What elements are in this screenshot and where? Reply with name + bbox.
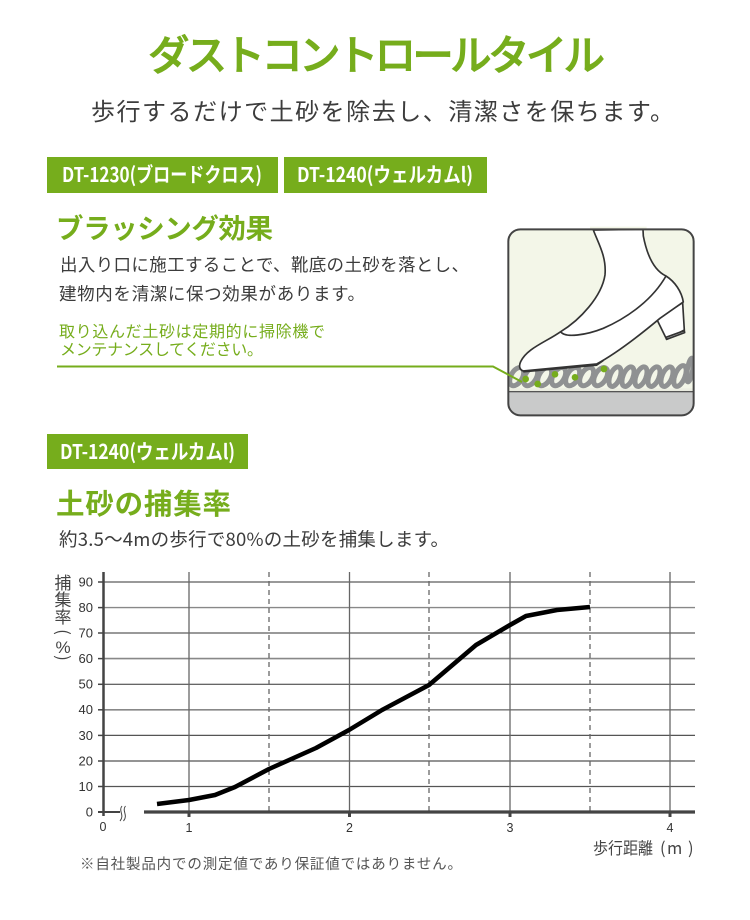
y axis title: % [55,638,71,657]
x axis tick labels: 3 [507,821,514,835]
soil particles [522,366,607,387]
tag: DT-1230: DT-1230(ブロードクロス) [62,158,262,188]
x axis tick labels: 4 [667,821,674,835]
x axis title: 歩行距離 [593,835,653,859]
x axis tick labels [100,820,674,835]
line chart [52,569,695,859]
y axis tick labels: 40 [79,702,93,717]
y axis tick labels: 10 [79,779,93,794]
y axis title: 捕 [54,569,72,594]
y axis title: ( [52,629,77,635]
body text: brushing effect: 建物内を清潔に保つ効果があります。 [59,281,365,306]
y axis tick labels: 70 [79,626,93,640]
y axis tick labels: 20 [79,753,93,768]
maintenance note: メンテナンスしてください。 [60,336,263,360]
x axis title [593,835,694,859]
y axis tick labels: 90 [79,574,93,590]
maintenance note: 取り込んだ土砂は定期的に掃除機で [59,318,325,342]
tag: DT-1240 top: DT-1240(ウェルカムl) [297,158,473,188]
y axis tick labels: 80 [79,600,93,615]
x axis tick labels: 1 [186,821,193,835]
subtitle: 歩行するだけで土砂を除去し、清潔さを保ちます。 [91,92,674,127]
title: ダストコントロールタイル [148,22,605,82]
tag: DT-1240 chart: DT-1240(ウェルカムl) [60,435,235,465]
x axis tick labels: 2 [346,821,353,835]
leader line [57,366,522,382]
y axis title: 集 [54,586,72,611]
y axis tick labels: 0 [86,804,93,820]
axes [98,572,695,821]
vertical grid [189,572,670,812]
x axis tick labels: 0 [100,820,107,834]
capture rate description: 約3.5〜4mの歩行で80%の土砂を捕集します。 [59,526,449,552]
y axis title: 率 [54,603,72,628]
y axis title: ) [52,655,77,661]
y axis title [52,569,77,661]
x axis title: (m) [660,835,694,859]
brush coils [507,358,695,388]
y axis tick labels: 30 [79,728,93,743]
horizontal grid [103,582,695,786]
footnote: ※自社製品内での測定値であり保証値ではありません。 [80,853,462,874]
y axis tick labels: 50 [79,677,93,692]
y axis tick labels [79,574,93,820]
maintenance note [59,318,325,360]
illustration: shoe on brush tile [507,227,695,416]
y axis tick labels: 60 [79,651,93,666]
shoe [520,227,685,372]
heading: brushing effect: ブラッシング効果 [56,206,273,246]
body text: brushing effect [59,252,469,306]
body text: brushing effect: 出入り口に施工することで、靴底の土砂を落とし、 [60,252,469,277]
capture curve [157,607,590,804]
heading: capture rate: 土砂の捕集率 [56,482,231,523]
